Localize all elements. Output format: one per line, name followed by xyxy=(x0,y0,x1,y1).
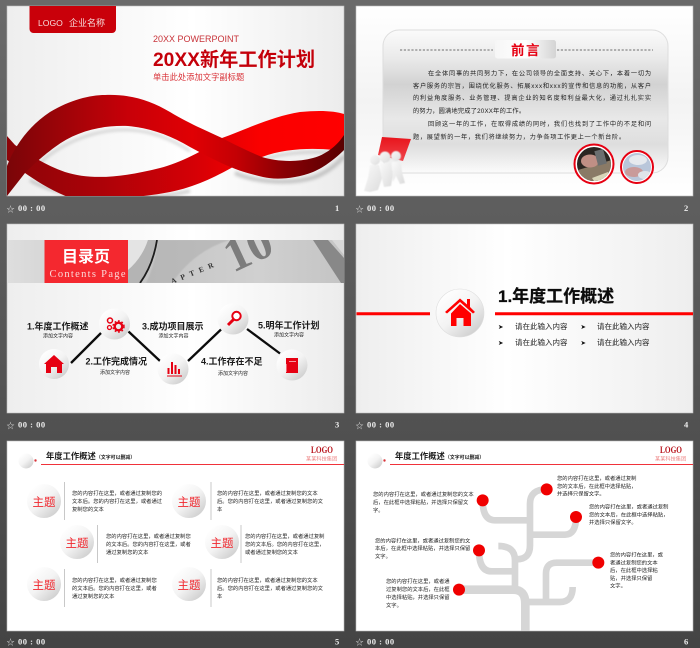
tree text D: 本后，在此框中选择粘贴，并选择只保留 xyxy=(375,544,470,552)
preface text: 题，展望新的一年，我们将继续努力，力争各项工作更上一个新台阶。 xyxy=(413,133,625,141)
item 5 label: 5.明年工作计划 xyxy=(258,320,320,330)
topic 3 xyxy=(60,525,191,563)
footer 3 xyxy=(6,420,340,430)
item 5 label: 添加文字内容 xyxy=(274,332,304,338)
topic 6: 后。您的内容打在这里，或者通过复制您的文 xyxy=(217,584,324,592)
topic 1: 文本后。您的内容打在这里，或者通过 xyxy=(72,497,163,505)
node: key xyxy=(218,304,248,334)
node: bar chart xyxy=(158,354,188,384)
topic 1: 复制您的文本 xyxy=(72,505,104,513)
bullet list: ➤ xyxy=(580,340,586,347)
footer 2: ☆ xyxy=(356,205,364,214)
topic 5 xyxy=(27,567,157,607)
chapter photo band: 10 xyxy=(215,215,281,283)
preface text: 的利益角度服务、业务管理、提高企业的知名度和利益最大化，通过扎扎实实 xyxy=(413,94,651,102)
topic 4 xyxy=(205,525,324,563)
tree text A xyxy=(373,490,474,514)
tree text D: 您的内容打在这里，或者通过复制您的文 xyxy=(375,536,471,544)
footer 3: 00 : 00 xyxy=(18,420,46,430)
slide header: LOGO xyxy=(660,445,682,455)
preface text: 客户服务的宗旨，围绕优化服务、拓展xxx和xxx的宣传和信息的功能，从客户 xyxy=(413,82,651,90)
topic 2: 后。您的内容打在这里，或者通过复制您的文 xyxy=(217,497,324,505)
item 3 label: 添加文字内容 xyxy=(158,332,189,340)
photo 1 xyxy=(574,144,614,184)
cover title block: 20XX POWERPOINT xyxy=(153,34,240,44)
footer 2: 2 xyxy=(684,203,689,213)
topic 6: 主题 xyxy=(178,579,201,592)
slide header xyxy=(18,445,344,468)
ribbon graphic xyxy=(7,95,344,198)
item 2 label xyxy=(86,356,147,376)
bullet list: 请在此输入内容 xyxy=(597,321,650,331)
topic 5: 通过复制您的文本 xyxy=(72,592,115,600)
item 3 label: 3.成功项目展示 xyxy=(142,320,204,332)
tree text E: 者通过复制您的文本 xyxy=(610,558,658,566)
connecting lines xyxy=(71,329,280,363)
topic 4: 您的文本后。您的内容打在这里， xyxy=(245,540,324,548)
topic 5: 您的内容打在这里，或者通过复制您 xyxy=(72,576,157,584)
tree text C: 您的内容打在这里，或者通过复制 xyxy=(589,502,668,510)
cover title block xyxy=(153,34,315,82)
topic 3: 您的内容打在这里，或者通过复制您 xyxy=(106,532,191,540)
tree text C: 并选择只保留文字。 xyxy=(589,518,637,526)
item 3 label xyxy=(142,320,204,340)
tree text E: 后，在此框中选择粘 xyxy=(610,566,658,574)
panel: slide 4 section xyxy=(356,224,693,413)
footer 6 xyxy=(356,636,689,647)
panel: slide 2 preface xyxy=(356,6,693,196)
footer 3: ☆ xyxy=(6,422,14,430)
footer 4 xyxy=(356,420,689,430)
topic 3: 通过复制您的文本 xyxy=(106,548,149,556)
chapter photo band xyxy=(7,240,344,283)
bullet list: 请在此输入内容 xyxy=(515,321,568,331)
panel: slide 6 tree xyxy=(356,441,693,631)
topic 5: 的文本后。您的内容打在这里，或者 xyxy=(72,584,157,592)
footer 3: 3 xyxy=(335,420,340,430)
tree text F xyxy=(386,577,450,609)
slide header: （文字可以删减） xyxy=(445,454,484,461)
footer 6: 6 xyxy=(684,636,689,646)
item 1 label: 1.年度工作概述 xyxy=(27,320,89,332)
item 1 label: 添加文字内容 xyxy=(43,332,73,340)
panel: slide 3 contents xyxy=(7,215,344,413)
contents page label: Contents Page xyxy=(50,269,126,280)
topic 3: 的文本后。您的内容打在这里，或者 xyxy=(106,540,191,548)
topic 5: 主题 xyxy=(32,579,56,592)
footer 2: 00 : 00 xyxy=(367,203,395,213)
bullet list xyxy=(498,321,650,347)
topic 1: 主题 xyxy=(32,496,56,509)
slide header: 某某科技集团 xyxy=(306,454,337,462)
tree text F: 您的内容打在这里，或者通 xyxy=(386,577,450,585)
slide header: 年度工作概述 xyxy=(395,451,445,461)
footer 2 xyxy=(356,203,689,214)
topic 6 xyxy=(172,567,324,607)
item 4 label: 4.工作存在不足 xyxy=(201,356,263,366)
footer 6: 00 : 00 xyxy=(367,636,395,646)
topic 1: 您的内容打在这里，或者通过复制您的 xyxy=(72,489,162,497)
node: home xyxy=(39,349,69,379)
bullet list: ➤ xyxy=(580,324,586,331)
node: book xyxy=(276,350,308,380)
chapter photo band: APTER xyxy=(169,259,219,286)
preface heading: 前言 xyxy=(511,42,541,58)
node: gears xyxy=(99,308,130,340)
topic 6: 本 xyxy=(217,592,223,600)
tree text B: 并选择只保留文字。 xyxy=(557,490,605,498)
slide header: LOGO xyxy=(311,445,333,455)
tree text A: 您的内容打在这里，或者通过复制您的文本 xyxy=(373,490,474,498)
bullet list: 请在此输入内容 xyxy=(515,337,568,347)
footer 4: 4 xyxy=(684,420,689,430)
item 5 label xyxy=(258,320,320,338)
flag and figures xyxy=(364,137,411,192)
tree text A: 后，在此框中选择粘贴，并选择只保留文 xyxy=(373,498,469,506)
footer 6: ☆ xyxy=(356,638,364,647)
tree text B: 您的文本后，在此框中选择粘贴， xyxy=(557,482,636,490)
bullet list: 请在此输入内容 xyxy=(597,337,650,347)
footer 1: ☆ xyxy=(6,205,14,214)
contents page label: 目录页 xyxy=(62,248,110,266)
preface text: 的努力，圆满地完成了20XX年的工作。 xyxy=(413,107,525,115)
topic 1 xyxy=(27,482,163,520)
item 4 label xyxy=(201,356,263,377)
footer 4: 00 : 00 xyxy=(367,420,395,430)
footer 4: ☆ xyxy=(356,422,364,430)
section title: 1.年度工作概述 xyxy=(498,286,614,306)
slide header: （文字可以删减） xyxy=(96,454,135,461)
red rule xyxy=(356,312,693,315)
topic 3: 主题 xyxy=(66,537,89,550)
item 1 label xyxy=(27,320,89,340)
footer 1 xyxy=(6,203,340,214)
preface heading xyxy=(495,40,556,58)
topic 4: 主题 xyxy=(210,537,234,550)
item 4 label: 添加文字内容 xyxy=(218,370,248,377)
bullet list: ➤ xyxy=(498,340,504,347)
tree text F: 中选择粘贴，并选择只保留 xyxy=(386,593,450,601)
slide header xyxy=(368,445,693,468)
dashed divider xyxy=(400,49,653,51)
preface text xyxy=(413,70,651,141)
contents page label xyxy=(44,240,128,283)
tree text E: 文字。 xyxy=(610,582,626,590)
tree text E: 您的内容打在这里，或 xyxy=(610,550,664,558)
logo tab xyxy=(30,6,116,33)
tree text B xyxy=(557,474,636,498)
tree text A: 字。 xyxy=(373,506,384,514)
icon: home xyxy=(436,289,484,337)
preface text: 在全体同事的共同努力下，在公司领导的全面支持、关心下，本着一切为 xyxy=(428,70,651,78)
footer 5: ☆ xyxy=(6,638,14,647)
footer 1: 00 : 00 xyxy=(18,203,46,213)
logo tab: 企业名称 xyxy=(69,17,105,28)
topic 2: 本 xyxy=(217,505,223,513)
topic 2: 主题 xyxy=(178,496,201,509)
preface text: 回顾这一年的工作，在取得成绩的同时，我们也找到了工作中的不足和问 xyxy=(428,120,651,128)
slide header: 年度工作概述 xyxy=(46,451,96,461)
tree text F: 文字。 xyxy=(386,601,402,609)
topic 2: 您的内容打在这里，或者通过复制您的文本 xyxy=(217,489,318,497)
item 2 label: 2.工作完成情况 xyxy=(86,356,147,366)
footer 5: 00 : 00 xyxy=(18,636,46,646)
footer 5 xyxy=(6,636,340,647)
tree text E: 贴，并选择只保留 xyxy=(610,574,652,582)
footer 1: 1 xyxy=(335,203,340,213)
cover title block: 单击此处添加文字副标题 xyxy=(153,72,244,82)
tree text D xyxy=(375,536,471,560)
tree text B: 您的内容打在这里，或者通过复制 xyxy=(557,474,636,482)
panel: slide 1 cover xyxy=(7,6,344,198)
logo tab: LOGO xyxy=(38,18,63,28)
topic 4: 您的内容打在这里，或者通过复制 xyxy=(245,532,324,540)
tree text C: 您的文本后，在此框中选择粘贴， xyxy=(589,510,668,518)
topic 2 xyxy=(172,482,324,520)
item 2 label: 添加文字内容 xyxy=(100,369,130,376)
footer 5: 5 xyxy=(335,636,340,646)
tree text E xyxy=(610,550,664,590)
panel: slide 5 topics xyxy=(7,441,344,631)
topic 6: 您的内容打在这里，或者通过复制您的文本 xyxy=(217,576,318,584)
tree text F: 过复制您的文本后，在此框 xyxy=(386,585,450,593)
tree text D: 文字。 xyxy=(375,552,391,560)
bullet list: ➤ xyxy=(498,324,504,331)
preface card xyxy=(383,30,668,173)
tree text C xyxy=(589,502,668,526)
tree diagram xyxy=(453,483,604,631)
cover title block: 20XX新年工作计划 xyxy=(153,48,315,71)
topic 4: 或者通过复制您的文本 xyxy=(245,548,299,556)
slide header: 某某科技集团 xyxy=(655,454,686,462)
photo 2 xyxy=(621,151,653,183)
